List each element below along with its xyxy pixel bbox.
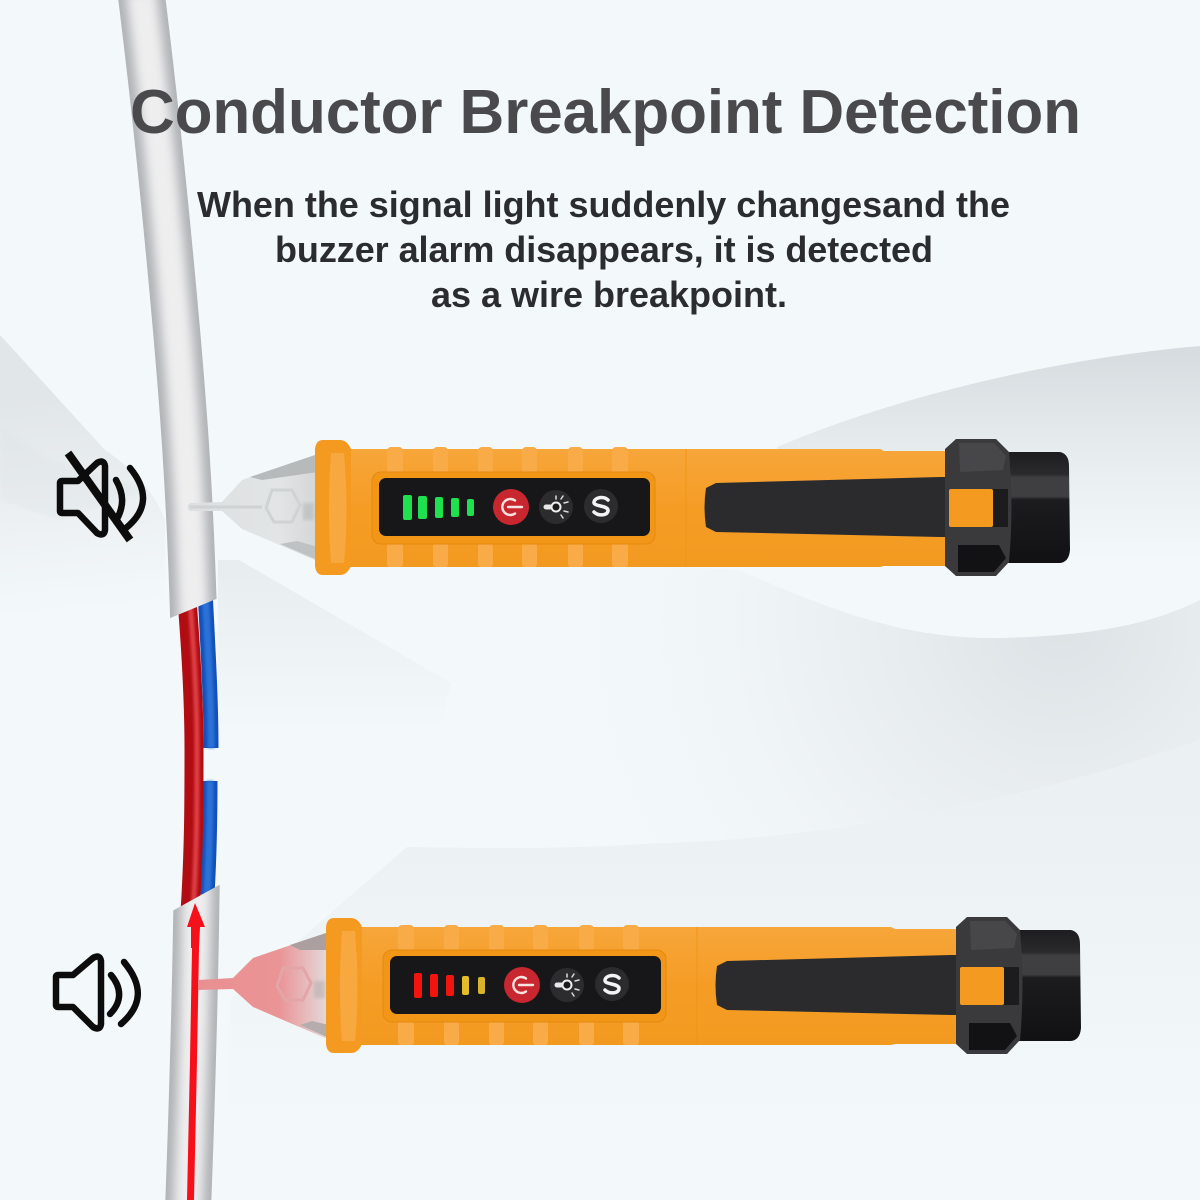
pen: upper tester with green LEDs — [188, 439, 1070, 576]
red and yellow LED bars — [414, 973, 485, 998]
icon: muted speaker — [60, 453, 143, 540]
description text: buzzer alarm disappears, it is detected — [275, 229, 933, 270]
icon: speaker with sound — [56, 957, 138, 1028]
lower probe tip — [198, 932, 329, 1038]
wire: red conductor — [187, 600, 197, 912]
wire: lower white sheath — [188, 860, 197, 1200]
description text — [197, 184, 1010, 315]
green LED bars — [403, 495, 474, 520]
arrow: signal direction — [187, 903, 205, 1200]
description text: as a wire breakpoint. — [431, 274, 787, 315]
wire: upper white sheath — [141, 0, 194, 630]
wire: blue conductor — [205, 590, 211, 895]
pen: lower tester with red LEDs — [198, 917, 1081, 1054]
title: Conductor Breakpoint Detection — [130, 78, 1081, 147]
description text: When the signal light suddenly changesand the — [197, 184, 1010, 225]
upper probe tip — [188, 454, 318, 560]
